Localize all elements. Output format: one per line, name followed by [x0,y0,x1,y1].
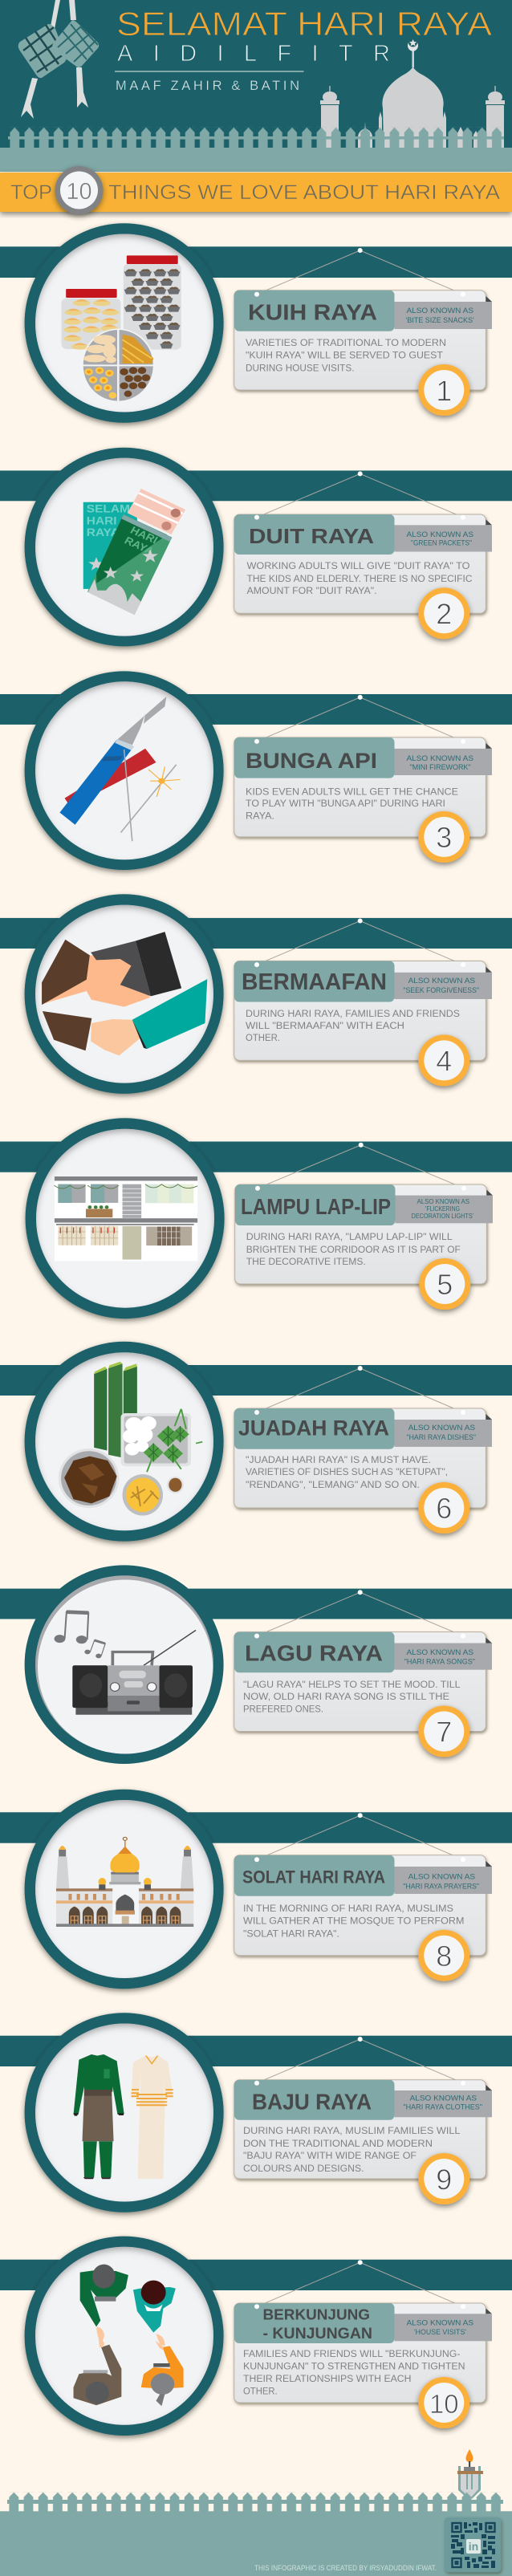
description: FAMILIES AND FRIENDS WILL "BERKUNJUNG- [243,2350,461,2359]
fold and ribbon [395,1190,493,1223]
icon: ketupat pair [18,0,99,119]
also known as: ALSO KNOWN AS [406,754,473,763]
band [0,246,512,278]
illustration: green packets and money: HARI [128,525,160,546]
fence [7,128,504,148]
title [263,2306,372,2342]
also known as: ALSO KNOWN AS [408,1424,475,1432]
description [246,339,446,373]
description: DURING HARI RAYA, MUSLIM FAMILIES WILL [243,2127,461,2136]
header banner [0,0,512,149]
description [243,2350,465,2396]
hanger [257,1590,463,1636]
panel: 8 solat hari raya [0,1790,512,1989]
title box [234,1855,395,1896]
illustration: music and radio [55,1610,196,1715]
description: OTHER. [243,2387,278,2396]
description: TO PLAY WITH "BUNGA API" DURING HARI [246,799,445,809]
description [243,1680,461,1715]
number badge 9 [418,2153,469,2204]
description: RAYA. [246,812,274,822]
description: PREFERED ONES. [243,1705,323,1715]
also known as: ALSO KNOWN AS [417,1198,469,1205]
hanger [257,248,463,295]
number badge 1: 1 [436,374,452,408]
description [246,787,458,822]
illustration: green packets and money: RAYA [123,534,156,557]
description: "SOLAT HARI RAYA". [243,1929,339,1939]
title: SOLAT HARI RAYA [242,1867,385,1887]
description: AMOUNT FOR "DUIT RAYA". [247,587,377,596]
medallion frame [25,1342,224,1542]
description: WILL GATHER AT THE MOSQUE TO PERFORM [243,1916,464,1926]
fold and ribbon [395,519,492,552]
panel: 6 juadah raya [0,1342,512,1542]
description: THE KIDS AND ELDERLY. THERE IS NO SPECIFIC [247,575,472,584]
also known as: "HARI RAYA SONGS" [404,1658,475,1667]
also known as: "HARI RAYA CLOTHES" [403,2103,482,2112]
ground [0,2511,512,2576]
title: DUIT RAYA [249,524,374,548]
illustration: green packets and money [83,489,185,615]
also known as: ALSO KNOWN AS [406,1648,473,1657]
band [0,2260,512,2290]
also known as [404,1648,475,1667]
illustration: jars and plate of cookies [61,255,181,402]
number badge 9: 9 [436,2164,452,2196]
description: "LAGU RAYA" HELPS TO SET THE MOOD. TILL [243,1680,461,1690]
hanger [257,2037,463,2083]
also known as: "MINI FIREWORK" [410,763,471,772]
fold and ribbon [395,2308,492,2341]
number badge 10 [418,2377,469,2428]
title: BERKUNJUNG [263,2306,370,2323]
title: SELAMAT HARI RAYA [116,5,492,43]
fold and ribbon [395,296,492,329]
title: LAGU RAYA [245,1640,383,1665]
card [234,737,492,837]
pins [254,739,465,744]
badge: 10 [55,166,103,214]
also known as: ALSO KNOWN AS [408,977,475,985]
icon: oil lamp [457,2449,483,2499]
description: "BAJU RAYA" WITH WIDE RANGE OF [243,2151,417,2161]
pins [254,962,465,967]
also known as: 'BITE SIZE SNACKS' [406,316,474,325]
title: LAMPU LAP-LIP [241,1194,391,1219]
hanger [257,1813,463,1859]
illustration: traditional clothes [74,2054,173,2179]
description: VARIETIES OF DISHES SUCH AS "KETUPAT", [246,1468,448,1477]
title: BUNGA API [246,749,377,773]
card [234,291,492,390]
also known as: 'HOUSE VISITS' [414,2328,466,2337]
medallion frame [25,2237,224,2436]
card [234,1632,492,1732]
pins [255,1186,466,1191]
number badge 4: 4 [436,1045,452,1077]
number badge 7: 7 [436,1716,452,1748]
also known as: ALSO KNOWN AS [406,530,473,539]
credit: THIS INFOGRAPHIC IS CREATED BY IRSYADUDDIN IFWAT. [254,2564,437,2572]
number badge 8 [418,1930,469,1981]
description: OTHER. [246,1034,280,1043]
panel: 4 bermaafan [0,894,512,1094]
description: THEIR RELATIONSHIPS WITH EACH [243,2375,411,2384]
fold and ribbon [395,1637,492,1670]
divider [115,71,303,72]
description: "KUIH RAYA" WILL BE SERVED TO GUEST [246,351,443,361]
number badge 8: 8 [436,1940,452,1973]
number badge 3 [418,811,469,863]
illustration: green packets and money: HARI [87,515,117,527]
fold and ribbon [395,1861,492,1894]
qr code card [445,2517,501,2572]
number badge 2: 2 [436,597,452,631]
description: DON THE TRADITIONAL AND MODERN [243,2139,433,2149]
description [246,1233,461,1267]
fence [6,2493,503,2512]
also known as [406,2319,473,2337]
title: JUADAH RAYA [238,1416,389,1440]
medallion frame [25,1565,224,1764]
also known as: "SEEK FORGIVENESS" [403,986,479,995]
pins [254,292,465,297]
also known as [403,1873,479,1891]
icon: linkedin: in [469,2540,478,2553]
title box [234,1408,395,1449]
heading word: top: TOP [10,181,52,204]
also known as: ALSO KNOWN AS [406,307,473,315]
description [247,562,472,596]
illustration: decorated corridor [55,1176,197,1261]
card [234,514,492,613]
description: BRIGHTEN THE CORRIDOOR AS IT IS PART OF [246,1245,461,1255]
also known as [403,977,479,995]
card [235,1184,493,1284]
also known as: "HARI RAYA DISHES" [406,1433,476,1442]
also known as: DECORATION LIGHTS' [412,1213,474,1220]
band [0,1812,512,1843]
card [234,2303,492,2403]
also known as: ALSO KNOWN AS [410,2095,477,2103]
hanger [257,695,463,742]
subtitle: AIDILFITR [117,41,390,67]
card [234,2080,492,2179]
description: DURING HARI RAYA, "LAMPU LAP-LIP" WILL [246,1233,453,1242]
medallion frame [25,671,224,870]
illustration: visitors from above [74,2265,184,2406]
band [0,1365,512,1396]
panel: 5 lampu lap-lip [0,1118,512,1318]
pins [254,1410,465,1415]
title: BAJU RAYA [252,2089,372,2114]
hanger [257,1366,463,1412]
panel: 9 baju raya [0,2013,512,2212]
also known as [406,530,473,548]
card [234,1408,492,1508]
title box [234,737,395,778]
card [234,961,492,1060]
band [0,918,512,949]
description: DURING HOUSE VISITS. [246,364,355,373]
number badge 6: 6 [436,1492,452,1525]
description [243,1904,464,1939]
description: KIDS EVEN ADULTS WILL GET THE CHANCE [246,787,458,797]
description [246,1010,460,1043]
title box [234,291,395,331]
icon: mosque silhouette [320,39,505,148]
illustration: festive dishes [59,1362,202,1516]
pins [254,1857,465,1862]
medallion frame [25,894,224,1094]
band [0,1589,512,1619]
fold and ribbon [395,2085,492,2117]
banner: top 10 [0,166,512,214]
badge: 10: 10 [66,179,92,205]
panel: 1 kuih raya [0,223,512,423]
description: NOW, OLD HARI RAYA SONG IS STILL THE [243,1692,449,1702]
illustration: grand mosque [56,1837,193,1927]
number badge 5: 5 [437,1268,453,1301]
title box [235,1184,395,1225]
description [246,1456,448,1490]
also known as: "GREEN PACKETS" [411,539,472,548]
panel: 2 duit raya [0,448,512,646]
number badge 2 [418,587,469,639]
hanger [257,471,463,518]
medallion frame [25,1790,224,1989]
medallion frame [25,448,224,646]
fold and ribbon [395,1414,492,1447]
description: "JUADAH HARI RAYA" IS A MUST HAVE. [246,1456,431,1465]
also known as [412,1198,474,1220]
hanger [257,2260,463,2306]
also known as: ALSO KNOWN AS [406,2319,473,2328]
number badge 5 [419,1258,470,1310]
fold and ribbon [395,967,492,999]
fold and ribbon [395,743,492,775]
description: IN THE MORNING OF HARI RAYA, MUSLIMS [243,1904,453,1914]
description: THE DECORATIVE ITEMS. [246,1258,366,1267]
medallion frame [26,1118,225,1318]
panel: 7 lagu raya [0,1565,512,1764]
also known as [406,307,474,325]
also known as [406,1424,476,1442]
medallion frame [25,223,224,423]
pins [254,2304,465,2309]
illustration: sparklers [59,697,181,841]
number badge 1 [418,364,469,416]
number badge 7 [418,1706,469,1757]
band [0,1141,512,1172]
title: BERMAAFAN [242,969,387,995]
medallion frame [25,2013,224,2212]
band [0,470,512,501]
card [234,1855,492,1956]
also known as: ALSO KNOWN AS [408,1873,475,1882]
number badge 10: 10 [429,2389,459,2419]
title box [234,2080,395,2120]
ground band [0,148,512,172]
heading text: THINGS WE LOVE ABOUT HARI RAYA [108,181,500,204]
description: KUNJUNGAN" TO STRENGTHEN AND TIGHTEN [243,2363,465,2372]
title: KUIH RAYA [248,299,377,324]
description [243,2127,461,2174]
title box [234,514,395,555]
pins [254,1634,465,1639]
band [0,2036,512,2066]
also known as: 'FLICKERING [425,1205,460,1213]
description: WILL "BERMAAFAN" WITH EACH [246,1022,404,1031]
panel: 10 berkunjung-kunjungan [0,2237,512,2436]
title box [234,2303,395,2343]
also known as: "HARI RAYA PRAYERS" [403,1882,479,1891]
panel: 3 bunga api [0,671,512,870]
hanger [257,918,463,965]
pins [254,2081,465,2086]
illustration: green packets and money: RAYA [87,527,120,539]
description: COLOURS AND DESIGNS. [243,2164,364,2174]
band [0,694,512,725]
description: VARIETIES OF TRADITIONAL TO MODERN [246,339,446,348]
description: WORKING ADULTS WILL GIVE "DUIT RAYA" TO [247,562,470,571]
tagline: MAAF ZAHIR & BATIN [116,79,299,93]
description: "RENDANG", "LEMANG" AND SO ON. [246,1481,420,1490]
title box [234,961,395,1002]
pins [254,515,465,520]
title box [234,1632,395,1672]
description: DURING HARI RAYA, FAMILIES AND FRIENDS [246,1010,460,1019]
footer [0,2449,512,2576]
illustration: green packets and money: SELAMA [87,503,140,515]
also known as [403,2095,482,2112]
number badge 6 [418,1482,469,1534]
number badge 4 [418,1034,469,1086]
illustration: handshakes [42,932,207,1055]
hanger [258,1143,464,1188]
number badge 3: 3 [436,821,452,854]
also known as [406,754,473,772]
title: - KUNJUNGAN [263,2326,372,2342]
